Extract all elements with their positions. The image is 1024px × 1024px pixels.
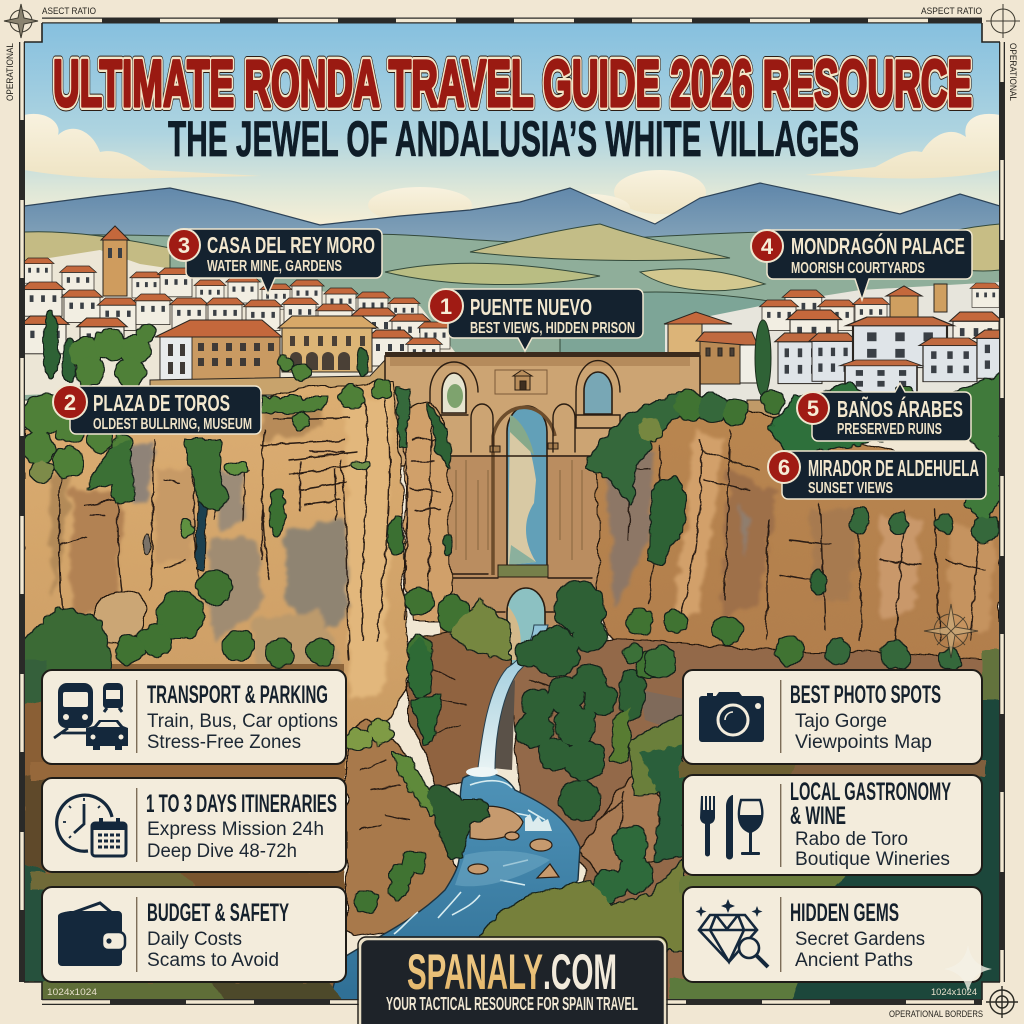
town houses [21, 258, 452, 367]
icon: clock and calendar [57, 795, 126, 856]
small niche [513, 370, 532, 390]
panel: transport and parking: Train, Bus, Car options [147, 711, 338, 732]
callout 6: Mirador de Aldehuela: SUNSET VIEWS [808, 480, 893, 497]
rock pillar [404, 402, 450, 620]
cliff cracks [625, 430, 985, 640]
river rocks [468, 806, 559, 878]
foliage: upper left [22, 380, 452, 555]
left slope rock [347, 720, 462, 937]
panel: budget and safety: Daily Costs [147, 929, 242, 950]
panel: best photo spots: Tajo Gorge [795, 711, 887, 732]
cliff cracks [59, 400, 440, 660]
panel: local gastronomy and wine: Boutique Wineries [795, 849, 950, 870]
callout 3: Casa del Rey Moro: 3 [178, 233, 190, 258]
panel: itineraries: Deep Dive 48-72h [147, 841, 297, 862]
icon: fork knife wine glass [700, 795, 763, 860]
footer brand panel: YOUR TACTICAL RESOURCE FOR SPAIN TRAVEL [386, 994, 638, 1014]
side arch left [442, 373, 466, 413]
panel: transport and parking: Stress-Free Zones [147, 732, 301, 753]
clouds [24, 114, 1000, 223]
town base [24, 250, 455, 395]
panel: local gastronomy and wine [683, 775, 982, 875]
margin label: aspect ratio left: ASECT RATIO [42, 6, 96, 17]
river highlights [394, 781, 545, 934]
icon: camera [699, 692, 764, 742]
panel: hidden gems: Secret Gardens [795, 929, 925, 950]
front row [664, 312, 1024, 393]
panel: transport and parking [42, 670, 346, 764]
rock cracks [360, 665, 625, 830]
left town [21, 226, 455, 395]
panel: budget and safety: Scams to Avoid [147, 950, 279, 971]
icon: train bus car [54, 683, 128, 750]
icon: diamond and magnifier [696, 899, 768, 967]
callout 1: Puente Nuevo [429, 289, 643, 351]
panel: budget and safety: BUDGET & SAFETY [147, 899, 289, 927]
foliage: centre trees [478, 583, 684, 950]
cliff shade patches [50, 395, 392, 700]
cliff mass [24, 380, 408, 770]
callout 3: Casa del Rey Moro [168, 229, 382, 294]
foliage: right cliff [585, 375, 1000, 678]
callout 2: Plaza de Toros [53, 385, 261, 434]
foliage: lower left trees [24, 571, 510, 913]
callout 3: Casa del Rey Moro: WATER MINE, GARDENS [207, 258, 342, 275]
cypress [755, 320, 771, 396]
panel: hidden gems: Ancient Paths [795, 950, 913, 971]
callout 4: Mondragon Palace [751, 230, 972, 300]
distant mountains [25, 182, 999, 242]
panel: hidden gems [683, 887, 982, 982]
callout 2: Plaza de Toros: 2 [64, 390, 76, 415]
right cliff [594, 410, 999, 660]
callout 6: Mirador de Aldehuela: 6 [778, 455, 790, 480]
callout 1: Puente Nuevo: PUENTE NUEVO [470, 294, 592, 320]
margin label: operational left: OPERATIONAL [5, 43, 16, 101]
lower arch [507, 588, 545, 664]
corner compass top left [4, 4, 38, 38]
callout 1: Puente Nuevo: BEST VIEWS, HIDDEN PRISON [470, 320, 635, 337]
cliff mass [594, 410, 999, 660]
callout 5: Banos Arabes [797, 383, 971, 441]
centre rock wall [410, 628, 512, 790]
callout 5: Banos Arabes: PRESERVED RUINS [837, 421, 942, 438]
callout 5: Banos Arabes: 5 [807, 396, 819, 421]
cliff shade patches [605, 430, 995, 640]
dimension label: bottom right: 1024x1024 [931, 987, 977, 998]
callout 2: Plaza de Toros: OLDEST BULLRING, MUSEUM [93, 416, 252, 433]
panel: itineraries [42, 778, 346, 872]
panel: transport and parking: TRANSPORT & PARKING [147, 681, 328, 709]
corner crosshair bottom right [986, 986, 1018, 1018]
side arch right [584, 372, 612, 414]
margin label: operational right: OPERATIONAL [1007, 43, 1018, 101]
panel: local gastronomy and wine: & WINE [790, 802, 846, 830]
central arch [507, 406, 547, 566]
left cliff [24, 380, 450, 770]
callout 2: Plaza de Toros: PLAZA DE TOROS [93, 390, 230, 416]
panel: itineraries: 1 TO 3 DAYS ITINERARIES [146, 790, 337, 818]
puente nuevo bridge [385, 352, 700, 664]
terrace wall [150, 360, 400, 395]
panel: best photo spots [683, 670, 982, 764]
boulder [94, 590, 146, 645]
lower gorge rock [24, 628, 1000, 1000]
town trees [44, 311, 368, 386]
panel: budget and safety [42, 887, 346, 982]
waterfall [466, 625, 548, 777]
back row [758, 282, 999, 342]
footer brand panel [358, 937, 667, 1024]
callout 5: Banos Arabes: BAÑOS ÁRABES [837, 395, 963, 422]
palace buildings [155, 320, 282, 382]
dimension label: bottom left: 1024x1024 [47, 987, 97, 998]
panel: itineraries: Express Mission 24h [147, 819, 324, 840]
sparkle watermark [944, 945, 992, 993]
sky [24, 23, 1000, 223]
callout 4: Mondragon Palace: MOORISH COURTYARDS [791, 260, 925, 277]
margin label: operational borders: OPERATIONAL BORDERS [889, 1009, 983, 1020]
corner crosshair top right [986, 4, 1020, 38]
callout 6: Mirador de Aldehuela [768, 451, 986, 499]
callout 3: Casa del Rey Moro: CASA DEL REY MORO [207, 232, 375, 258]
panel: local gastronomy and wine: Rabo de Toro [795, 829, 908, 850]
footer brand panel: SPANALY [407, 944, 543, 1000]
compass rose [924, 604, 978, 658]
right bank rock [510, 640, 1000, 1000]
icon: wallet [58, 903, 125, 966]
callout 1: Puente Nuevo: 1 [440, 294, 452, 319]
river [330, 773, 580, 1000]
callout 4: Mondragon Palace: 4 [761, 234, 774, 259]
rolling hills [24, 224, 1000, 400]
foliage: margins around panels [24, 650, 1006, 1004]
pedestal [746, 400, 780, 417]
panel: hidden gems: HIDDEN GEMS [790, 899, 899, 927]
panel: best photo spots: Viewpoints Map [795, 732, 932, 753]
margin label: aspect ratio right: ASPECT RATIO [921, 6, 982, 17]
footer brand panel: .COM [543, 944, 617, 1000]
bell tower [101, 226, 129, 296]
right town [664, 282, 999, 417]
